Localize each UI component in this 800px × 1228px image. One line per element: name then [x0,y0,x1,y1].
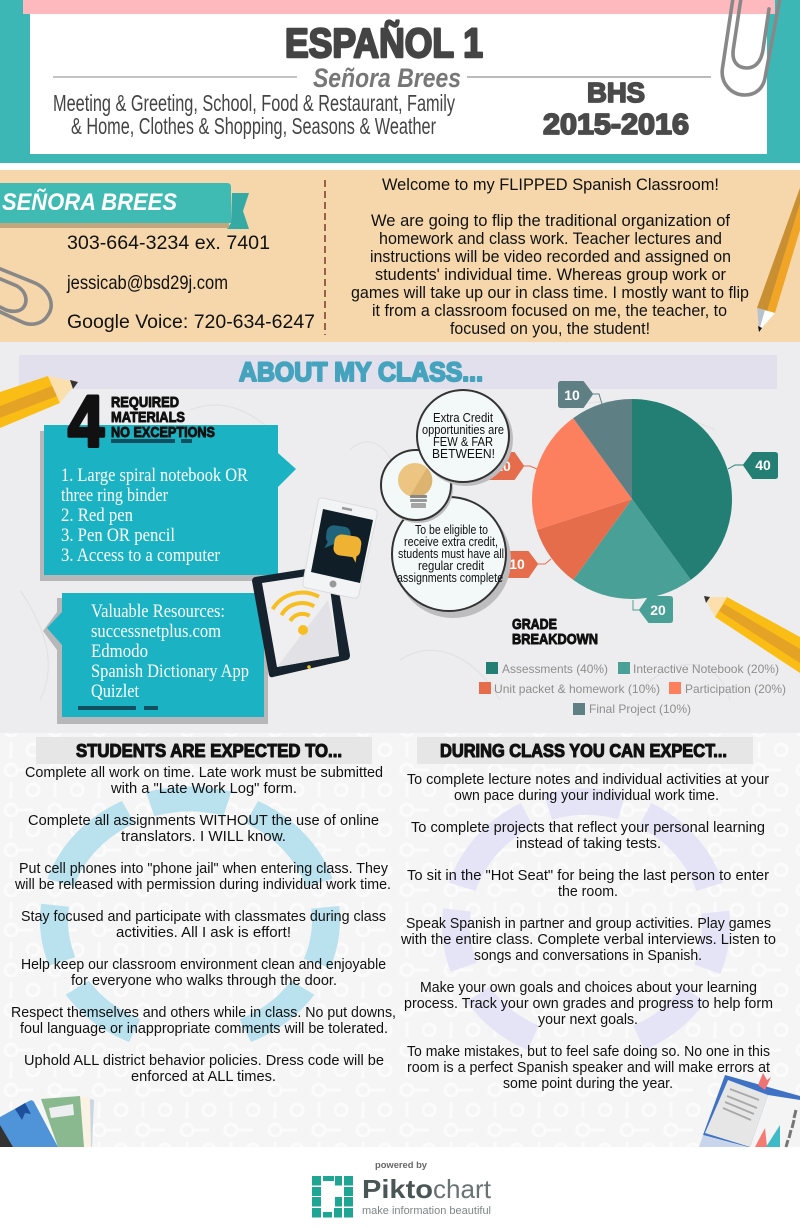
school and year [543,77,689,141]
materials heading [111,395,215,441]
text: class expectations: your next goals. [538,1011,638,1028]
data label 20 participation: 20 [495,458,511,474]
heading: during class you can expect: DURING CLASS YOU CAN EXPECT... [440,741,727,761]
wordmark: Pikto [362,1174,433,1204]
title: ESPAÑOL 1 [285,20,483,66]
valuable resources box: Valuable Resources: [91,601,225,622]
materials list: three ring binder [61,485,169,506]
valuable resources box: Edmodo [91,641,148,662]
school and year: 2015-2016 [543,109,689,141]
chart legend: Assessments (40%) [502,662,608,676]
text: student expectations [11,764,396,1085]
text: class expectations: To make mistakes, but to feel safe doing so. No one in this [407,1043,770,1060]
icon: open book [699,1073,800,1147]
chart legend: Interactive Notebook (20%) [633,662,779,676]
text: student expectations: activities. All I ask is effort! [116,924,291,941]
icon: smartphone [303,498,377,598]
contact details: jessicab@bsd29j.com [66,272,228,294]
data label 20 interactive notebook [640,597,672,622]
section heading: ABOUT MY CLASS... [239,357,483,387]
icon: light bulb [381,450,453,523]
valuable resources box: Quizlet [91,681,140,702]
text: student expectations: translators. I WILL know. [121,828,286,845]
text: class expectations: room is a perfect Spanish speaker and will make errors at [407,1059,771,1076]
welcome text: students' individual time. Whereas group work or [375,266,726,284]
text: student expectations: with a "Late Work Log" form. [110,780,297,797]
contact details: 303-664-3234 ex. 7401 [67,232,270,254]
icon: notebooks [0,1096,94,1147]
callout: extra credit note: FEW & FAR [433,435,493,449]
data label 20 participation [490,453,523,479]
text: class expectations [400,771,776,1092]
materials list: 2. Red pen [61,505,133,526]
materials list: 1. Large spiral notebook OR [61,465,248,486]
materials list: 3. Pen OR pencil [61,525,175,546]
school and year: BHS [587,77,645,108]
text: student expectations: for everyone who walks through the door. [71,972,337,989]
materials heading: NO EXCEPTIONS [111,425,215,441]
text: student expectations: Complete all work on time. Late work must be submitted [25,764,383,781]
heading: during class you can expect [417,737,753,764]
panel: header [0,0,800,163]
text: class expectations: To complete lecture notes and individual activities at your [407,771,769,788]
chart legend: Final Project (10%) [589,702,691,716]
callout: extra credit eligibility: regular credit [418,559,484,573]
welcome text: instructions will be video recorded and assigned on [370,248,731,266]
materials heading: MATERIALS [111,410,185,426]
footer: piktochart branding: powered by [375,1160,428,1171]
decorative ring left [1,752,379,1088]
welcome text: We are going to flip the traditional organization of [371,212,730,230]
text: class expectations: some point during the year. [503,1075,673,1092]
text: class expectations: To sit in the "Hot Seat" for being the last person to enter [407,867,769,884]
grade breakdown heading [512,617,598,648]
text: class expectations: Make your own goals and choices about your learning [420,979,757,996]
text: class expectations: instead of taking tests. [516,835,661,852]
decorative ring right [406,754,766,1096]
callout: extra credit eligibility: receive extra credit, [404,535,498,549]
callout: extra credit eligibility: To be eligible to [415,523,488,537]
callout: extra credit note: BETWEEN! [432,447,495,461]
materials list: 3. Access to a computer [61,545,221,566]
valuable resources box: successnetplus.com [91,621,221,642]
text: class expectations: Speak Spanish in partner and group activities. Play games [406,915,771,932]
data label 40 assessments [744,453,777,478]
text: class expectations: own pace during your individual work time. [454,787,719,804]
text: class expectations: process. Track your own grades and progress to help form [404,995,773,1012]
welcome text: games will take up our in class time. I mostly want to flip [351,284,749,302]
heading: students are expected to: STUDENTS ARE EXPECTED TO... [76,741,342,761]
course topics: & Home, Clothes & Shopping, Seasons & Weather [71,113,436,139]
panel: about my class [0,342,800,733]
grade breakdown heading: BREAKDOWN [512,632,598,648]
text: student expectations: Help keep our classroom environment clean and enjoyable [21,956,386,973]
chart: grade breakdown pie [490,382,777,622]
section heading [19,355,777,389]
text: class expectations: To complete projects that reflect your personal learning [411,819,765,836]
icon: paperclip [722,0,780,95]
data label 10 unit packet: 10 [509,556,525,572]
chart legend [479,662,786,716]
callout: extra credit note [417,390,513,486]
icon: tablet [252,565,350,677]
number 4: 4 [68,382,104,462]
panel: contact and welcome [0,170,800,342]
text: student expectations: Complete all assignments WITHOUT the use of online [28,812,379,829]
text: student expectations: foul language or inappropriate comments will be tolerated. [20,1020,388,1037]
text: class expectations: songs and conversations in Spanish. [474,947,702,964]
chart legend: Unit packet & homework (10%) [494,682,660,696]
panel: expectations [0,733,800,1147]
contact details [66,232,315,333]
welcome text: it from a classroom focused on me, the teacher, to [372,302,727,320]
text: class expectations: the room. [558,883,618,900]
footer: piktochart branding [312,1160,492,1218]
data label 40 assessments: 40 [755,457,771,473]
icon: pencil right [704,596,800,673]
course topics: Meeting & Greeting, School, Food & Restaurant, Family [53,90,455,116]
text: class expectations: with the entire class. Complete verbal interviews. Listen to [400,931,776,948]
data label 20 interactive notebook: 20 [650,602,666,618]
wordmark: chart [433,1174,492,1204]
welcome text: focused on you, the student! [450,320,650,338]
callout: extra credit note: opportunities are [422,423,504,437]
callout: extra credit note: Extra Credit [433,411,493,425]
data label 10 final project [559,382,592,407]
wordmark [362,1174,492,1204]
ribbon banner: SEÑORA BREES [2,188,177,216]
text: student expectations: will be released with permission during individual work time. [14,876,391,893]
subtitle: teacher name: Señora Brees [313,63,461,93]
welcome text: homework and class work. Teacher lectures and [379,230,722,248]
icon: pencil [757,188,800,332]
materials heading: REQUIRED [111,395,179,411]
course topics [53,90,455,139]
text: student expectations: Stay focused and participate with classmates during class [21,908,386,925]
required materials box [40,382,296,581]
contact details: Google Voice: 720-634-6247 [67,311,315,333]
callout: extra credit eligibility: assignments complete [397,571,503,585]
grade breakdown heading: GRADE [512,617,557,633]
text: student expectations: Put cell phones into "phone jail" when entering class. They [19,860,388,877]
data label 10 final project: 10 [564,387,580,403]
callout: extra credit eligibility: students must have all [398,547,504,561]
valuable resources box: Spanish Dictionary App [91,661,249,682]
welcome text: Welcome to my FLIPPED Spanish Classroom! [382,176,719,194]
text: student expectations: enforced at ALL times. [131,1068,276,1085]
text: student expectations: Respect themselves and others while in class. No put downs, [11,1004,396,1021]
tagline: make information beautiful [362,1205,491,1217]
data label 10 unit packet [505,552,537,577]
ribbon banner [0,183,249,229]
icon: piktochart logo [312,1176,353,1218]
icon: pencil left [0,376,78,428]
valuable resources box [43,593,268,724]
heading: students are expected to [36,737,372,764]
welcome text [351,176,749,338]
materials list [61,465,248,566]
callout: extra credit eligibility [392,497,511,618]
chart legend: Participation (20%) [685,682,786,696]
icon: paperclip [0,268,51,324]
text: student expectations: Uphold ALL district behavior policies. Dress code will be [24,1052,384,1069]
